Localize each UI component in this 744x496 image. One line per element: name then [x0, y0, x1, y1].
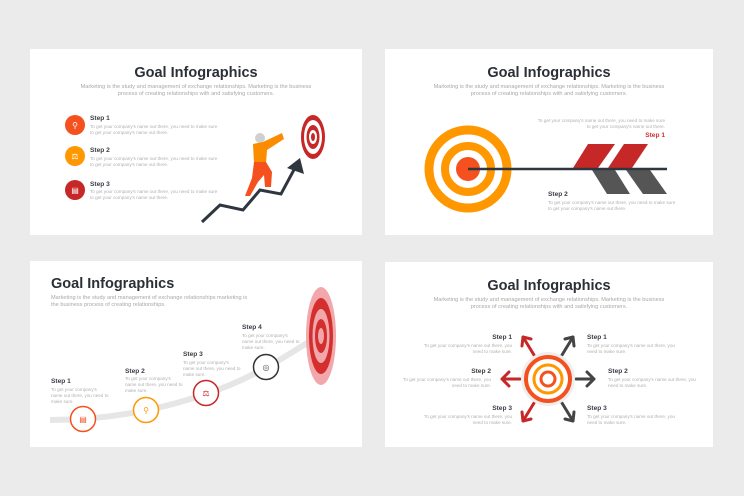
step labels: need to make sure.	[473, 349, 512, 354]
step list: to get your company's name out there.	[90, 195, 168, 200]
subtitle	[81, 84, 312, 97]
steps: make sure.	[183, 372, 206, 377]
steps: name out there, you need to	[183, 366, 241, 371]
steps: ⚖	[202, 389, 210, 398]
subtitle	[434, 297, 665, 310]
title: Goal Infographics	[51, 276, 174, 292]
icon: red target	[306, 287, 336, 385]
step labels	[403, 334, 696, 425]
subtitle: process of creating relationships with and satisfying customers.	[471, 304, 628, 310]
steps	[51, 324, 300, 432]
panel: climbing goal	[30, 49, 362, 235]
step list: Step 1	[90, 115, 110, 122]
text: step 2: to get your company's name out there.	[548, 206, 626, 211]
text: step 1: to get your company's name out there.	[587, 124, 665, 129]
subtitle: the business process of creating relationships.	[51, 302, 166, 308]
step list: ▤	[71, 186, 79, 195]
step labels: need to make sure.	[587, 420, 626, 425]
arrows	[502, 337, 594, 421]
steps: ⚲	[143, 406, 149, 415]
path curve	[50, 333, 320, 420]
steps: ◎	[263, 363, 270, 372]
text: step 2	[548, 191, 676, 211]
subtitle: Marketing is the study and management of exchange relationships marketing is	[51, 295, 247, 301]
step labels: Step 1	[587, 334, 607, 341]
step labels: need to make sure.	[473, 420, 512, 425]
subtitle: Marketing is the study and management of exchange relationships. Marketing is the business	[434, 297, 665, 303]
subtitle: process of creating relationships with and satisfying customers.	[118, 91, 275, 97]
step labels: To get your company's name out there, you	[587, 414, 675, 419]
steps: Step 1	[51, 378, 71, 385]
step labels: To get your company's name out there, you	[587, 343, 675, 348]
step labels: Step 3	[492, 405, 512, 412]
subtitle: process of creating relationships with and satisfying customers.	[471, 91, 628, 97]
steps: To get your company's	[183, 360, 230, 365]
icon: center target	[521, 352, 575, 406]
step labels: Step 2	[608, 368, 628, 375]
step list: Step 3	[90, 181, 110, 188]
arrow: shaft and fletching	[468, 144, 667, 194]
title: Goal Infographics	[487, 278, 611, 294]
text: step 2: To get your company's name out there, you need to make sure	[548, 200, 676, 205]
subtitle	[434, 84, 665, 97]
step labels: To get your company's name out there, you	[403, 377, 491, 382]
steps: To get your company's	[242, 333, 289, 338]
step labels: Step 2	[471, 368, 491, 375]
steps: To get your company's	[125, 376, 172, 381]
subtitle: Marketing is the study and management of exchange relationships. Marketing is the business	[434, 84, 665, 90]
step labels: need to make sure.	[587, 349, 626, 354]
steps: name out there, you need to	[242, 339, 300, 344]
steps: make sure.	[51, 399, 74, 404]
text: step 1	[538, 118, 665, 139]
step labels: To get your company's name out there, you	[424, 343, 512, 348]
step list: to get your company's name out there.	[90, 162, 168, 167]
steps: Step 3	[183, 351, 203, 358]
subtitle: Marketing is the study and management of exchange relationships. Marketing is the business	[81, 84, 312, 90]
icon: person	[245, 133, 284, 196]
text: step 2: Step 2	[548, 191, 568, 198]
steps: Step 2	[125, 368, 145, 375]
text: step 1: Step 1	[645, 132, 665, 139]
title: Goal Infographics	[487, 65, 611, 81]
arrow: rising	[202, 158, 304, 222]
icon: orange target	[429, 130, 507, 208]
steps: To get your company's	[51, 387, 98, 392]
panel: radial arrows	[385, 262, 713, 447]
step labels: To get your company's name out there, you	[424, 414, 512, 419]
step labels: To get your company's name out there, you	[608, 377, 696, 382]
step list: ⚲	[72, 121, 78, 130]
steps: make sure.	[125, 388, 148, 393]
step labels: Step 3	[587, 405, 607, 412]
steps: Step 4	[242, 324, 262, 331]
title: Goal Infographics	[134, 65, 258, 81]
step list: To get your company's name out there, you need to make sure	[90, 124, 218, 129]
step list: To get your company's name out there, you need to make sure	[90, 156, 218, 161]
step labels: Step 1	[492, 334, 512, 341]
step list: to get your company's name out there.	[90, 130, 168, 135]
step labels: need to make sure.	[452, 383, 491, 388]
subtitle	[51, 295, 247, 308]
panel: arrow target	[385, 49, 713, 235]
step labels: need to make sure.	[608, 383, 647, 388]
step list: Step 2	[90, 147, 110, 154]
steps: name out there, you need to	[125, 382, 183, 387]
step list: To get your company's name out there, you need to make sure	[90, 189, 218, 194]
steps: name out there, you need to	[51, 393, 109, 398]
icon: target	[301, 115, 325, 159]
steps: make sure.	[242, 345, 265, 350]
step list: ⚖	[71, 152, 79, 161]
text: step 1: To get your company's name out there, you need to make sure	[538, 118, 665, 123]
step list	[65, 115, 218, 200]
steps: ▤	[79, 415, 87, 424]
panel: path to goal	[30, 261, 362, 447]
